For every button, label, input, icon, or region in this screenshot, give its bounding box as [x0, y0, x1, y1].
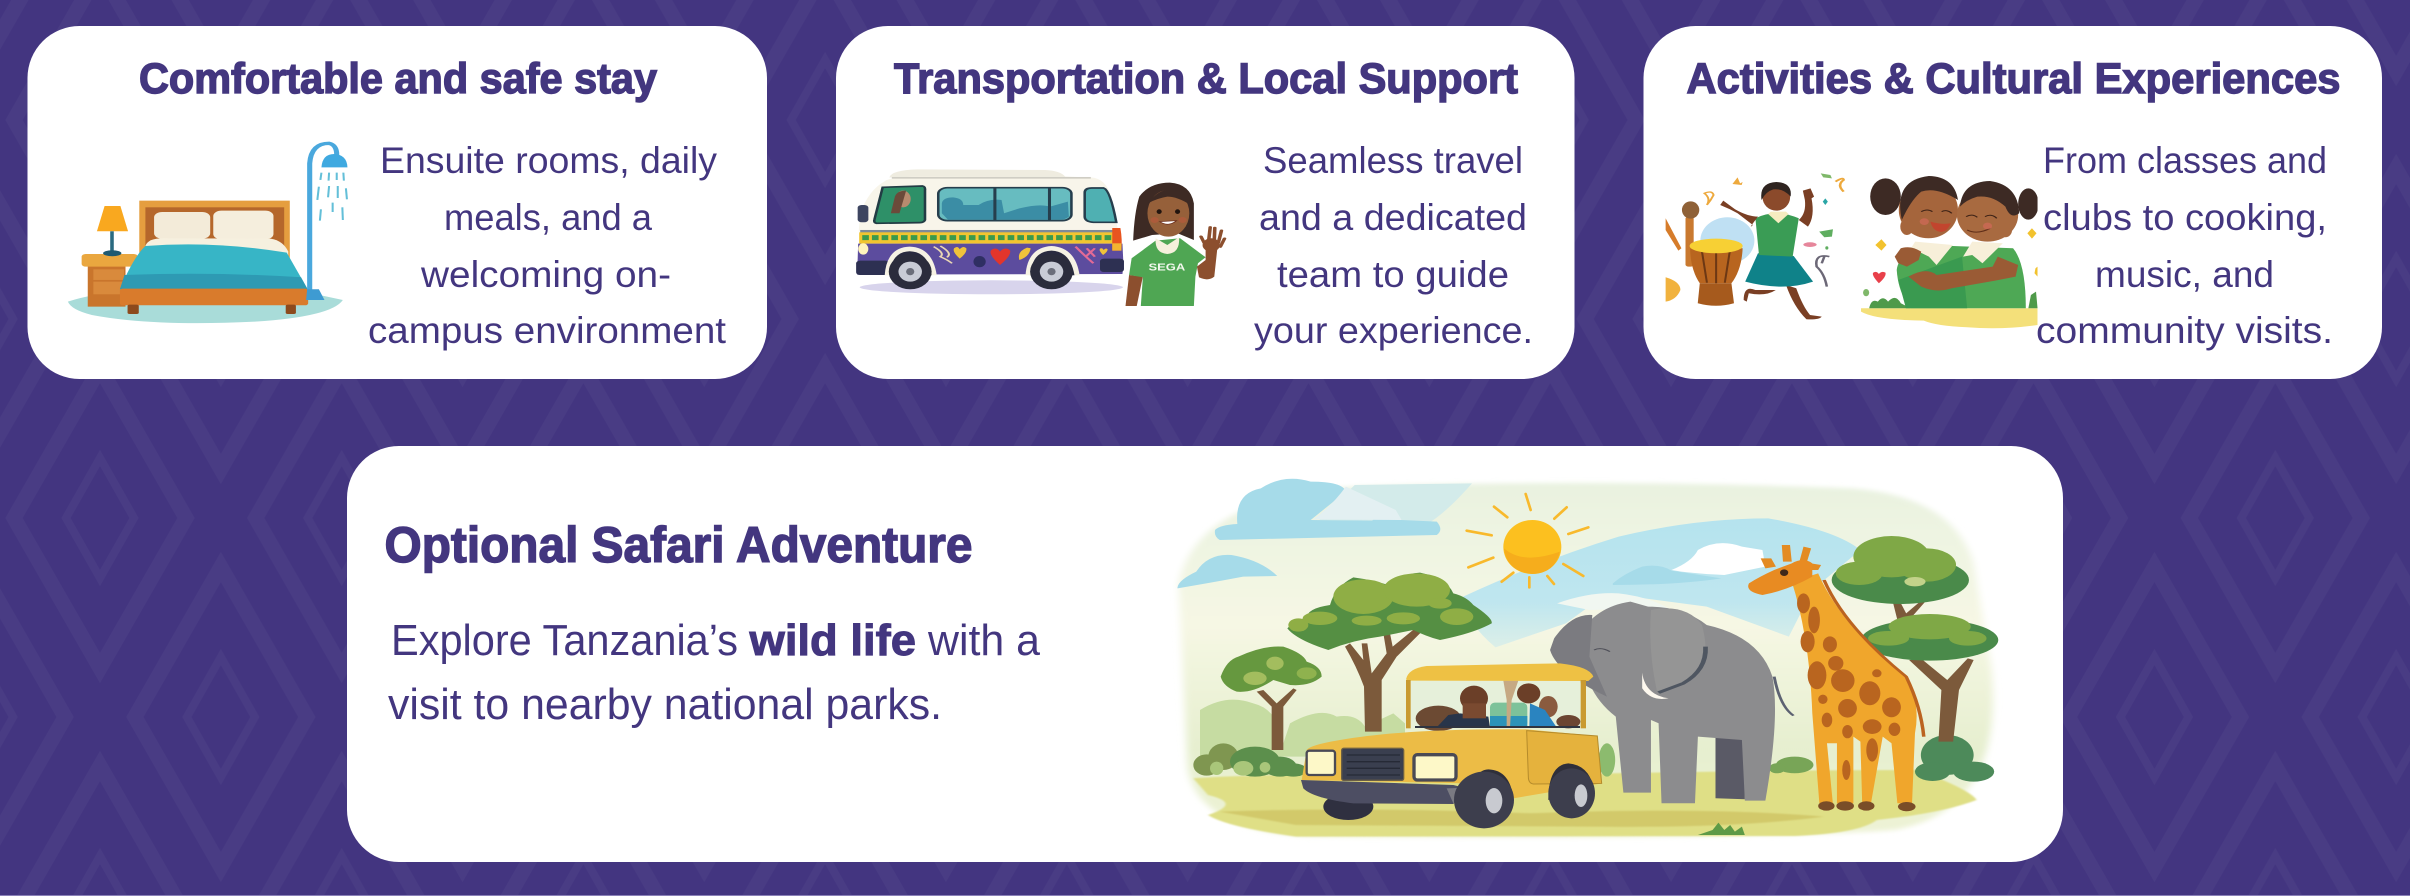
text block: activities description: clubs to cooking, — [2043, 197, 2327, 238]
text block: transport description: Seamless travel — [1263, 140, 1523, 181]
text block: transport description — [1254, 140, 1533, 351]
text block: transport description: and a dedicated — [1259, 197, 1527, 238]
text block: activities description: music, and — [2095, 254, 2274, 295]
small acacia tree — [1221, 646, 1322, 750]
icon: two girls hugging — [1861, 176, 2039, 328]
text block: activities description: From classes and — [2043, 140, 2327, 181]
ground — [1193, 770, 1977, 837]
heading: optional safari adventure: Optional Safari Adventure — [384, 517, 972, 573]
text block: activities description — [2036, 140, 2333, 351]
icon: guide in SEGA shirt waving — [1126, 183, 1224, 306]
text block: stay description — [368, 140, 727, 351]
panel: transportation and local support — [836, 26, 1574, 379]
sun — [1467, 494, 1588, 587]
text block: stay description: campus environment — [368, 310, 727, 351]
hill and bushes behind the trees — [1193, 700, 1405, 777]
panel: optional safari adventure — [347, 446, 2063, 862]
text block: safari description — [388, 616, 1041, 729]
heading: transportation and local support: Transportation & Local Support — [894, 55, 1518, 103]
blue sky streak — [1463, 518, 1860, 647]
label: SEGA on shirt: SEGA — [1148, 261, 1186, 273]
right acacia tree — [1832, 536, 1998, 742]
heading: comfortable and safe stay: Comfortable and safe stay — [139, 55, 657, 103]
text block: stay description: Ensuite rooms, daily — [380, 140, 717, 181]
sky, clouds, far scenery and right-hand animals — [1177, 479, 1998, 837]
text block: stay description: meals, and a — [444, 197, 652, 238]
text block: safari description: visit to nearby national parks. — [388, 680, 942, 729]
large acacia tree — [1287, 573, 1492, 732]
heading: activities and cultural experiences: Activities & Cultural Experiences — [1686, 55, 2340, 103]
text block: safari description: wild life — [748, 616, 916, 665]
text block: stay description: welcoming on- — [420, 254, 671, 295]
panel: comfortable and safe stay — [28, 26, 767, 379]
giraffe — [1748, 545, 1924, 811]
clouds — [1177, 479, 1765, 610]
sky and savanna backdrop — [1179, 483, 1993, 837]
safari jeep — [1301, 663, 1602, 828]
icon: bed, nightstand, lamp and shower — [68, 143, 347, 323]
illustration: safari scene — [1177, 479, 1998, 837]
text block: activities description: community visits. — [2036, 310, 2333, 351]
text block: safari description: Explore Tanzania’s — [391, 616, 738, 665]
text block: transport description: team to guide — [1277, 254, 1509, 295]
icon: decorated van — [856, 169, 1124, 294]
sun, left trees and jeep — [1193, 494, 1602, 828]
foreground grass — [1698, 823, 1745, 835]
elephant — [1550, 602, 1794, 803]
text block: safari description: with a — [927, 616, 1041, 665]
icon: girl dancing beside a drum — [1666, 173, 1844, 319]
text block: transport description: your experience. — [1254, 310, 1533, 351]
bushes on the far side — [1599, 735, 1994, 782]
panel: activities and cultural experiences — [1644, 26, 2382, 379]
